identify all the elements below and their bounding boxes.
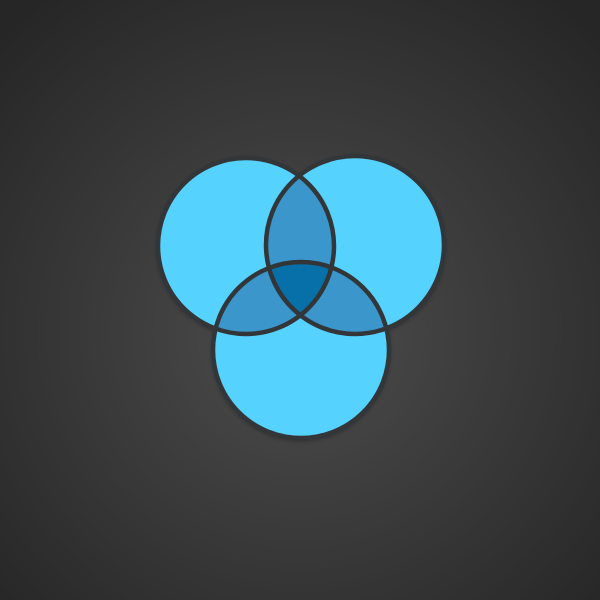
overlaps	[218, 178, 384, 332]
outlines	[158, 156, 444, 438]
venn diagram	[54, 83, 547, 576]
circles base	[158, 156, 444, 438]
